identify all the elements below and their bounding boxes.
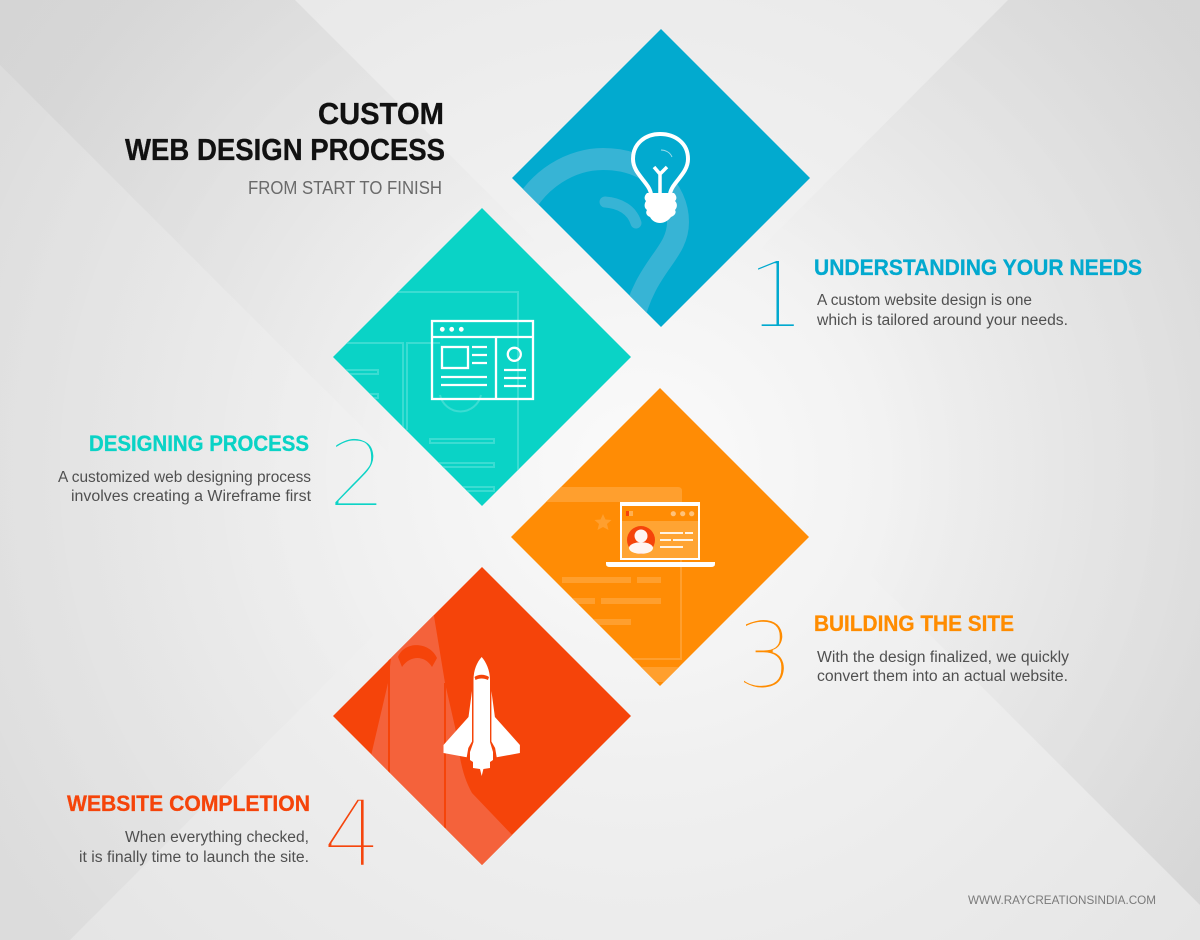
subtitle: FROM START TO FINISH bbox=[248, 178, 442, 198]
icon: laptop bbox=[606, 502, 715, 567]
description 1: A custom website design is one bbox=[817, 292, 1032, 309]
heading 2: DESIGNING PROCESS bbox=[89, 431, 309, 456]
icon: light bulb bbox=[633, 134, 688, 223]
description 3 bbox=[817, 649, 1069, 685]
panel: diamond 4 completion bbox=[333, 567, 631, 875]
description 3: convert them into an actual website. bbox=[817, 668, 1068, 685]
number 4: 4 bbox=[323, 781, 382, 888]
icon: wireframe window bbox=[432, 321, 533, 399]
description 4: it is finally time to launch the site. bbox=[79, 849, 309, 866]
description 4: When everything checked, bbox=[125, 829, 309, 846]
number 1: 1 bbox=[747, 242, 806, 349]
title bbox=[125, 96, 445, 167]
heading 1: UNDERSTANDING YOUR NEEDS bbox=[814, 255, 1142, 280]
panel: diamond 3 building bbox=[511, 388, 809, 686]
heading 3: BUILDING THE SITE bbox=[814, 611, 1014, 636]
description 2: A customized web designing process bbox=[58, 469, 311, 486]
faded page layout bbox=[546, 487, 682, 682]
icon: rocket bbox=[444, 657, 520, 776]
step 2 text bbox=[58, 431, 312, 505]
description 3: With the design finalized, we quickly bbox=[817, 649, 1069, 666]
number 3: 3 bbox=[736, 602, 795, 709]
number 2: 2 bbox=[328, 421, 387, 528]
step 4 text bbox=[67, 791, 310, 866]
description 1 bbox=[816, 292, 1068, 329]
heading 4: WEBSITE COMPLETION bbox=[67, 791, 310, 816]
description 1: which is tailored around your needs. bbox=[816, 312, 1068, 329]
step 1 text bbox=[814, 255, 1142, 329]
faded rocket bbox=[370, 610, 515, 875]
footer url: WWW.RAYCREATIONSINDIA.COM bbox=[968, 893, 1156, 907]
avatar bbox=[627, 526, 655, 554]
panel: diamond 2 designing bbox=[333, 208, 631, 506]
large faded bulb bbox=[515, 159, 678, 325]
title: WEB DESIGN PROCESS bbox=[125, 132, 445, 167]
title: CUSTOM bbox=[318, 96, 444, 131]
step 3 text bbox=[814, 611, 1069, 685]
panel: diamond 1 understanding bbox=[512, 29, 810, 327]
description 2: involves creating a Wireframe first bbox=[71, 488, 312, 505]
description 2 bbox=[58, 469, 312, 505]
faded wireframe bbox=[340, 292, 518, 491]
description 4 bbox=[79, 829, 309, 866]
